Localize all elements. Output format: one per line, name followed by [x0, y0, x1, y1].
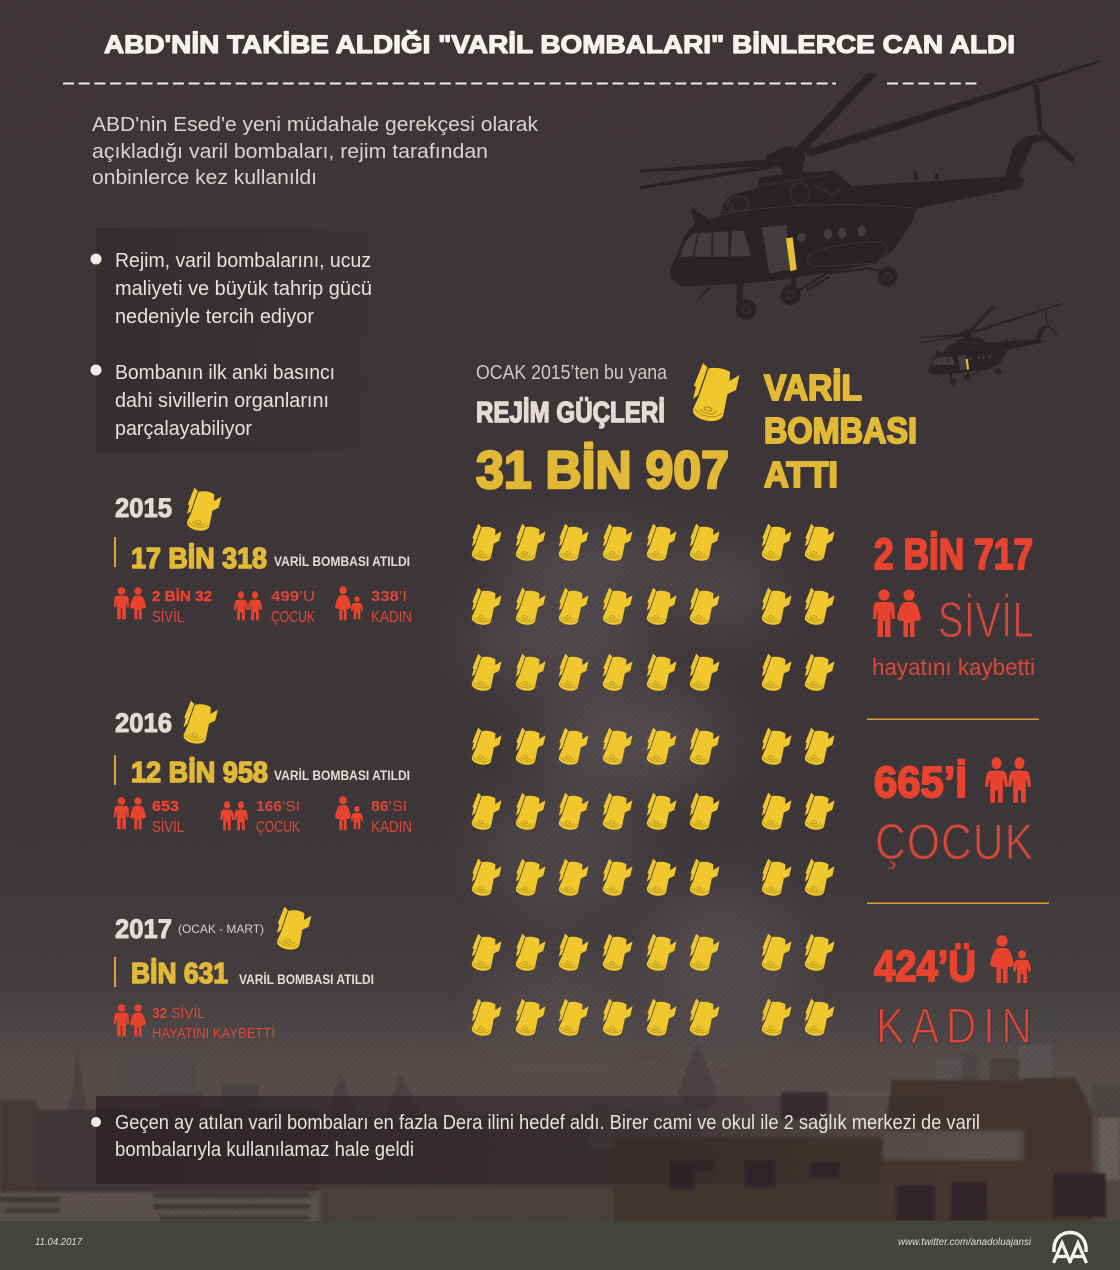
panel: 2016: 2016: [115, 708, 172, 738]
panel: 2015: 2015: [115, 493, 172, 523]
intro text: onbinlerce kez kullanıldı: [92, 167, 317, 189]
stat: children: 665’İ: [874, 758, 967, 807]
panel: 2015: KADIN: [371, 609, 412, 626]
panel: 2017: BİN 631: [131, 958, 228, 990]
stat: children: ÇOCUK: [875, 814, 1033, 870]
bullet 2: dahi sivillerin organlarını: [115, 390, 329, 412]
headline total: REJİM GÜÇLERİ: [476, 396, 665, 429]
bullet 2: [90, 362, 335, 440]
panel: 2015: 338’İ: [371, 587, 407, 605]
stat: women: KADIN: [876, 998, 1032, 1054]
headline total: OCAK 2015’ten bu yana: [476, 362, 668, 384]
bullet 2: Bombanın ilk anki basıncı: [115, 362, 335, 384]
stat: children: [874, 757, 1033, 870]
footer: www.twitter.com/anadoluajansi: [898, 1237, 1032, 1248]
title dashed rule: [63, 82, 977, 84]
panel: 2015: VARİL BOMBASI ATILDI: [274, 554, 410, 569]
panel: 2017: VARİL BOMBASI ATILDI: [239, 972, 374, 987]
intro text: [92, 114, 539, 189]
panel: bottom note: [91, 1096, 1120, 1184]
panel: bullet points: [90, 228, 422, 453]
panel: 2016: SİVİL: [152, 817, 184, 836]
panel: 2017: HAYATINI KAYBETTİ: [152, 1024, 275, 1042]
panel: bottom note: bombalarıyla kullanılamaz hale geldi: [115, 1139, 414, 1161]
stat: women: [874, 935, 1032, 1054]
panel: 2016: 166’SI: [256, 798, 300, 815]
heading: varil bombası attı: [764, 367, 917, 495]
divider: [867, 718, 1039, 720]
heading: varil bombası attı: VARİL: [764, 367, 862, 408]
headline total: [476, 362, 729, 500]
panel: 2015: ÇOCUK: [271, 609, 315, 626]
panel: 2017: (OCAK - MART): [178, 922, 264, 936]
panel: 2016: KADIN: [371, 819, 412, 836]
stat: civilians: SİVİL: [938, 593, 1034, 648]
panel: 2015: 499’U: [271, 588, 315, 605]
bullet 2: parçalayabiliyor: [115, 418, 252, 440]
stat: civilians: [872, 530, 1035, 680]
icon: barrel bomb: [693, 363, 740, 421]
panel: 2017: [114, 907, 374, 1042]
panel: bottom note: Geçen ay atılan varil bombaları en fazla Dera ilini hedef aldı. Birer cami ve okul ile 2 sağlık merkezi de varil: [115, 1112, 980, 1134]
stat: women: 424’Ü: [874, 942, 976, 991]
panel: 2016: [114, 701, 412, 836]
bullet 1: maliyeti ve büyük tahrip gücü: [115, 278, 372, 300]
footer: [0, 1221, 1120, 1270]
helicopter small: [919, 302, 1066, 385]
divider: [867, 902, 1049, 904]
headline total: 31 BİN 907: [476, 441, 729, 500]
panel: 2016: 12 BİN 958: [131, 757, 268, 789]
stat: civilians: 2 BİN 717: [874, 530, 1033, 579]
bomb pictogram grid: [472, 524, 835, 1036]
icon: AA logo: [1054, 1232, 1086, 1263]
panel: 2015: 17 BİN 318: [131, 543, 267, 575]
heading: varil bombası attı: ATTI: [764, 454, 838, 495]
panel: 2016: 653: [152, 798, 179, 815]
bullet 1: nedeniyle tercih ediyor: [115, 306, 314, 328]
heading: varil bombası attı: BOMBASI: [764, 410, 917, 451]
intro text: açıkladığı varil bombaları, rejim tarafından: [92, 141, 488, 163]
panel: 2017: 2017: [115, 914, 172, 944]
panel: 2017: 32 SİVİL: [152, 1004, 205, 1022]
panel: 2015: 2 BİN 32: [152, 588, 212, 605]
title: ABD'NİN TAKİBE ALDIĞI "VARİL BOMBALARI" BİNLERCE CAN ALDI: [104, 30, 1015, 59]
stat: civilians: hayatını kaybetti: [872, 654, 1035, 680]
panel: 2015: [114, 488, 412, 626]
bullet 1: [90, 250, 372, 328]
panel: 2016: ÇOCUK: [256, 819, 300, 836]
panel: 2016: VARİL BOMBASI ATILDI: [274, 768, 410, 783]
intro text: ABD'nin Esed'e yeni müdahale gerekçesi olarak: [92, 114, 539, 136]
footer: 11.04.2017: [35, 1237, 82, 1248]
panel: 2016: 86’SI: [371, 798, 407, 815]
panel: 2015: SİVİL: [152, 607, 184, 626]
helicopter large: [640, 60, 1100, 320]
bullet 1: Rejim, varil bombalarını, ucuz: [115, 250, 371, 272]
